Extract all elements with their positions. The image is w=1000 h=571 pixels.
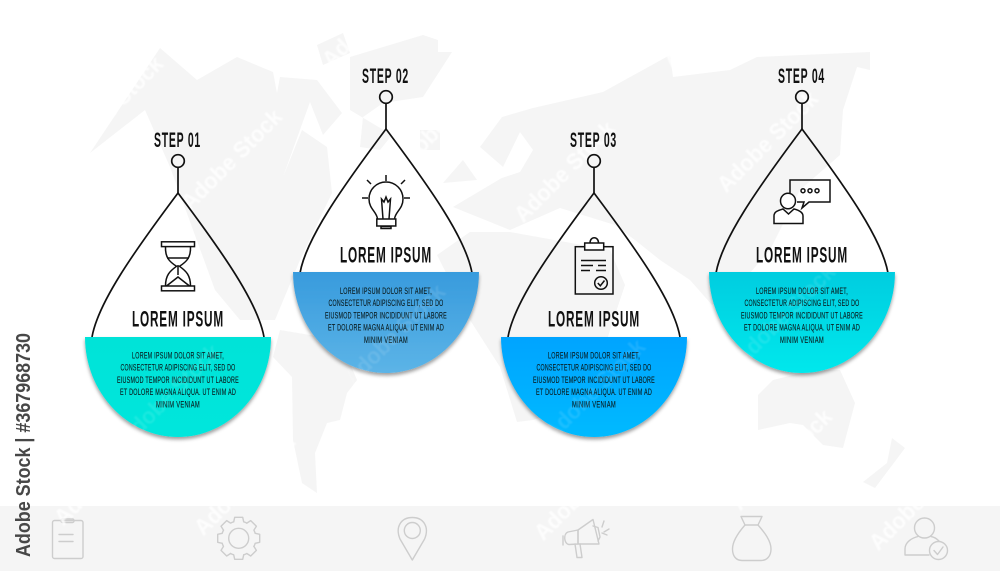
stock watermark pattern under the drops: Adobe Stock [386,66,498,178]
body text [117,350,239,409]
body text: LOREM IPSUM DOLOR SIT AMET, [548,350,640,360]
stock watermark pattern under the drops: Adobe Stock [663,288,775,400]
icon: user with check [905,518,948,560]
icon: megaphone [563,520,609,558]
icon: gear [218,517,260,559]
body text: CONSECTETUR ADIPISCING ELIT, SED DO [744,298,860,308]
connector pin [172,155,184,193]
icon: clipboard [52,519,83,558]
stock watermark pattern under the drops: Adobe Stock [863,443,975,555]
body text: MINIM VENIAM [780,335,824,345]
teardrop outline [508,193,680,337]
step 02 teardrop: STEP 02 [362,65,409,88]
stock watermark pattern under the drops: Adobe Stock [175,103,287,215]
body text: ET DOLORE MAGNA ALIQUA. UT ENIM AD [328,323,444,333]
connector pin [380,91,392,129]
body text [325,286,447,345]
stock watermark pattern under the drops: Adobe Stock [835,118,947,230]
faint watermark over the coloured panels [113,258,840,450]
faint watermark over the coloured panels: Adobe Stock [728,258,840,370]
stock watermark pattern under the drops: Adobe Stock [388,393,500,505]
body text: MINIM VENIAM [364,335,408,345]
stock watermark pattern under the drops: Adobe Stock [0,283,110,395]
body text: LOREM IPSUM DOLOR SIT AMET, [132,350,224,360]
icon: location pin [398,518,426,560]
step 03 teardrop [501,129,687,437]
step 04 teardrop [709,65,895,373]
stock watermark pattern under the drops: Adobe Stock [528,433,640,545]
step 01 teardrop [85,129,271,437]
step 03 teardrop: STEP 03 [570,129,617,152]
coloured half circle [709,272,895,373]
teardrop outline [300,129,472,273]
stock watermark pattern under the drops: Adobe Stock [725,403,837,515]
body text: CONSECTETUR ADIPISCING ELIT, SED DO [328,298,444,308]
stock watermark pattern under the drops: Adobe Stock [873,263,985,375]
step 04 teardrop: STEP 04 [778,65,825,88]
bottom icon band [0,506,1000,571]
coloured half circle [501,337,687,437]
body text: EIUSMOD TEMPOR INCIDIDUNT UT LABORE [533,375,655,385]
body text: CONSECTETUR ADIPISCING ELIT, SED DO [120,363,236,373]
body text: LOREM IPSUM DOLOR SIT AMET, [756,286,848,296]
body text: MINIM VENIAM [156,399,200,409]
icon: person with speech bubble [774,180,830,224]
body text [533,350,655,409]
icon: money bag [732,516,771,560]
body text: ET DOLORE MAGNA ALIQUA. UT ENIM AD [536,387,652,397]
body text: EIUSMOD TEMPOR INCIDIDUNT UT LABORE [741,310,863,320]
stock watermark pattern under the drops: Adobe Stock [508,115,620,227]
body text: ET DOLORE MAGNA ALIQUA. UT ENIM AD [120,387,236,397]
body text [741,286,863,345]
title: LOREM IPSUM [548,306,640,332]
teardrop outline [92,193,264,337]
stock watermark pattern under the drops: Adobe Stock [188,428,300,540]
coloured half circle [293,272,479,373]
title: LOREM IPSUM [756,242,848,268]
title: LOREM IPSUM [340,242,432,268]
faint watermark over the coloured panels: Adobe Stock [113,338,225,450]
world map background [90,33,905,493]
step 01 teardrop: STEP 01 [154,129,201,152]
faint watermark over the coloured panels: Adobe Stock [338,278,450,390]
connector pin [588,155,600,193]
faint watermark over the coloured panels: Adobe Stock [538,333,650,445]
body text: MINIM VENIAM [572,399,616,409]
stock watermark pattern under the drops: Adobe Stock [56,50,168,162]
icon: clipboard with check [575,238,613,294]
coloured half circle [85,337,271,437]
stock watermark pattern under the drops: Adobe Stock [711,85,823,197]
body text: ET DOLORE MAGNA ALIQUA. UT ENIM AD [744,323,860,333]
title: LOREM IPSUM [132,306,224,332]
teardrop outline [716,129,888,273]
body text: LOREM IPSUM DOLOR SIT AMET, [340,286,432,296]
body text: EIUSMOD TEMPOR INCIDIDUNT UT LABORE [117,375,239,385]
body text: CONSECTETUR ADIPISCING ELIT, SED DO [536,363,652,373]
connector pin [796,91,808,129]
map gap: inland notch [480,132,533,182]
vertical stock id label: Adobe Stock | #367968730 [13,333,35,557]
step 02 teardrop [293,65,479,373]
stock watermark pattern under the drops: Adobe Stock [48,418,160,530]
icon: light bulb [362,175,410,228]
icon: hourglass [162,242,194,291]
body text: EIUSMOD TEMPOR INCIDIDUNT UT LABORE [325,310,447,320]
